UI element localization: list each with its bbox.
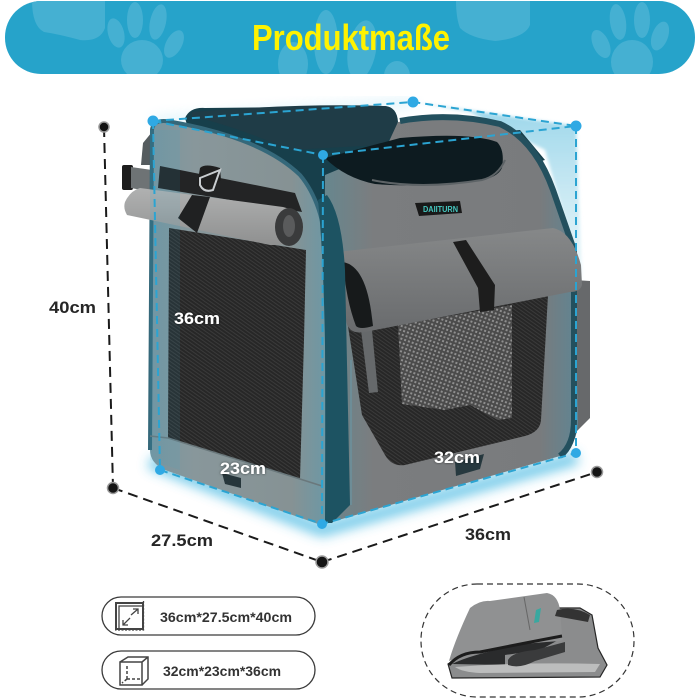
front panel	[322, 117, 578, 524]
front mesh window	[347, 295, 548, 465]
side panel rim	[150, 121, 327, 523]
inner size pill	[102, 651, 315, 689]
folded bag handle	[555, 609, 590, 622]
outer size text: 36cm*27.5cm*40cm	[160, 610, 292, 625]
side pocket	[574, 280, 590, 432]
outer dimension lines	[104, 127, 597, 562]
folded bag light lining	[455, 663, 600, 673]
inner dimension labels: 36cm	[174, 310, 220, 328]
front tab	[455, 454, 484, 476]
zipper line	[350, 360, 352, 505]
folded bag callout	[421, 584, 634, 697]
blue tint over bag	[150, 130, 180, 470]
brand label: DAIITURN	[423, 205, 458, 214]
top handle	[192, 105, 397, 150]
left mesh window	[168, 228, 306, 479]
header banner	[5, 1, 695, 74]
opening lip	[372, 160, 505, 185]
buckle	[122, 132, 152, 192]
icon: outer size	[115, 601, 144, 630]
icon: inner size cube	[120, 657, 148, 685]
inner dimension labels	[174, 310, 480, 478]
left side panel	[150, 121, 327, 524]
bottom side tab	[222, 473, 241, 488]
outer dimension labels: 27.5cm	[151, 532, 213, 550]
title: Produktmaße	[252, 17, 450, 58]
outer dimension points	[99, 122, 602, 568]
d-ring	[197, 166, 221, 192]
folded bag dark gap	[452, 638, 562, 665]
outer dimension labels	[49, 299, 511, 550]
folded bag pocket seam	[524, 597, 530, 630]
zipper band	[318, 195, 350, 523]
inner size text: 32cm*23cm*36cm	[163, 664, 281, 679]
rolled front flap	[337, 228, 582, 332]
blue corner points	[148, 96, 582, 529]
front mesh strap	[361, 330, 378, 393]
side roll	[124, 188, 303, 246]
folded bag base	[448, 608, 607, 678]
outer size pill	[102, 597, 315, 635]
folded bag upper flap	[449, 593, 563, 661]
side strap	[158, 166, 302, 212]
paw print pattern	[32, 1, 669, 74]
brand label	[415, 201, 462, 216]
carrier bag illustration	[122, 105, 590, 524]
outer dimension labels: 40cm	[49, 299, 96, 317]
blue dashed inner dimensions	[153, 102, 576, 524]
front rim	[400, 117, 574, 456]
top opening	[325, 136, 503, 185]
bag glow	[148, 102, 582, 530]
side bottom seam	[150, 436, 322, 486]
folded bag roll	[508, 642, 565, 666]
outer dimension labels: 36cm	[465, 526, 511, 544]
mesh curtain	[398, 305, 512, 420]
inner dimension labels: 23cm	[220, 460, 266, 478]
top dark panel	[185, 106, 545, 215]
inner dimension labels: 32cm	[434, 449, 480, 467]
folded bag edge	[449, 636, 562, 665]
folded bag label	[534, 608, 541, 623]
